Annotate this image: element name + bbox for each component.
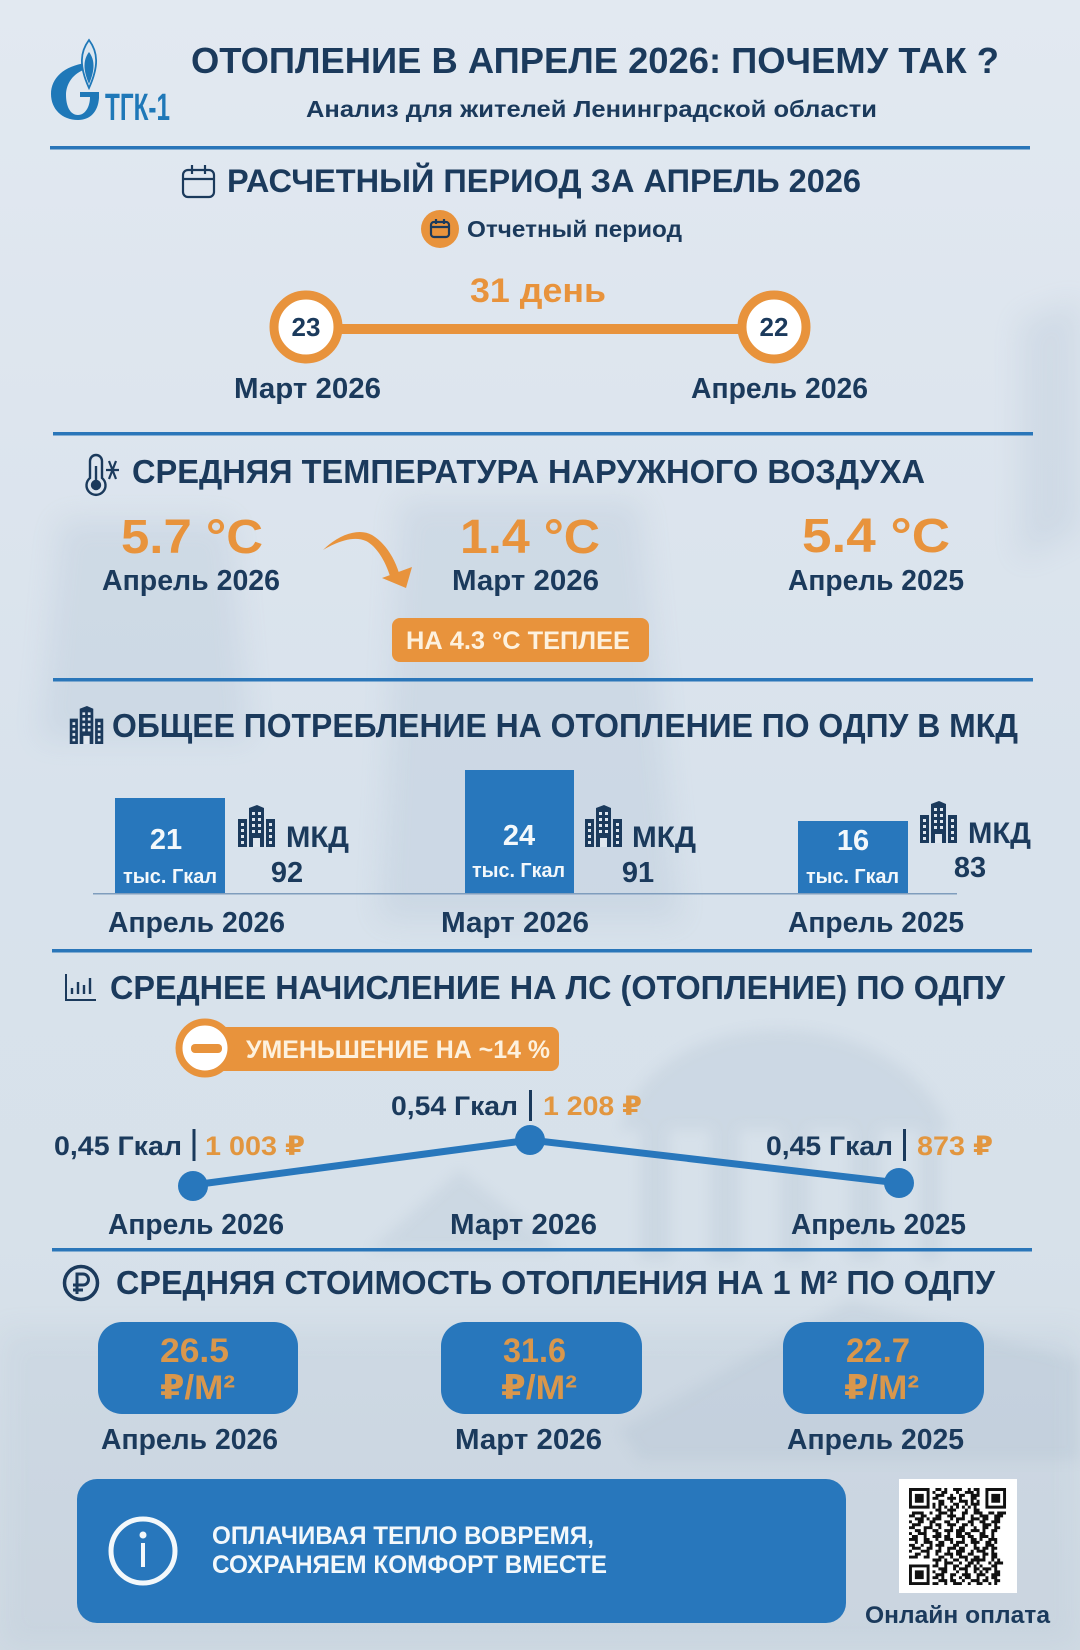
bar: April 2026: тыс. Гкал: [123, 866, 217, 888]
data label: March 2026: 1 208 ₽: [543, 1091, 642, 1121]
icon: TGK-1 logo: ТГК-1: [105, 87, 170, 129]
banner text: ОПЛАЧИВАЯ ТЕПЛО ВОВРЕМЯ,: [212, 1522, 594, 1550]
card: March 2026: [441, 1322, 642, 1414]
bar: March 2026: [465, 770, 574, 893]
axis label: April 2026: Апрель 2026: [108, 1209, 284, 1241]
heading: consumption: ОБЩЕЕ ПОТРЕБЛЕНИЕ НА ОТОПЛЕНИЕ ПО ОДПУ В МКД: [112, 707, 1018, 744]
heading: average charge: СРЕДНЕЕ НАЧИСЛЕНИЕ НА ЛС (ОТОПЛЕНИЕ) ПО ОДПУ: [110, 969, 1005, 1006]
MKD count: 91: 91: [622, 857, 654, 889]
subtitle: Анализ для жителей Ленинградской области: [306, 96, 877, 122]
card: March 2026: ₽/М²: [501, 1369, 577, 1407]
badge: reporting period: Отчетный период: [467, 216, 682, 242]
value: April 2025: 5.4 °C: [802, 510, 950, 563]
value: April 2026: 5.7 °C: [121, 511, 263, 564]
banner text: СОХРАНЯЕМ КОМФОРТ ВМЕСТЕ: [212, 1551, 607, 1579]
axis label: March 2026: Март 2026: [441, 907, 589, 939]
data label: April 2025: 873 ₽: [917, 1131, 993, 1161]
panel: billing period: [183, 163, 868, 405]
bar: April 2025: тыс. Гкал: [806, 866, 899, 888]
MKD count: 83: 83: [954, 852, 986, 884]
bar: April 2026: [115, 798, 225, 893]
bar: April 2025: [798, 821, 908, 893]
axis label: April 2025: Апрель 2025: [788, 907, 964, 939]
axis label: April 2026: Апрель 2026: [108, 907, 285, 939]
icon: thermometer with snowflake: [86, 455, 119, 495]
title: ОТОПЛЕНИЕ В АПРЕЛЕ 2026: ПОЧЕМУ ТАК ?: [191, 40, 999, 81]
bar: April 2025: 16: [837, 825, 869, 857]
axis label: April 2025: Апрель 2025: [791, 1209, 966, 1241]
bar: April 2026: 21: [150, 824, 182, 856]
data label: April 2026: 0,45 Гкал: [54, 1131, 182, 1161]
card: April 2025: 22.7: [846, 1332, 910, 1370]
bar: March 2026: 24: [503, 820, 535, 852]
data label: April 2025: 0,45 Гкал: [766, 1131, 893, 1161]
value: April 2026: Апрель 2026: [102, 565, 280, 597]
bar: March 2026: тыс. Гкал: [472, 860, 565, 882]
value: April 2025: [788, 510, 964, 597]
QR code: online payment: [899, 1479, 1017, 1593]
heading: cost per square metre: СРЕДНЯЯ СТОИМОСТЬ ОТОПЛЕНИЯ НА 1 М² ПО ОДПУ: [116, 1264, 995, 1301]
panel: average charge: [54, 969, 1005, 1241]
icon: buildings: [70, 706, 103, 744]
heading: temperature: СРЕДНЯЯ ТЕМПЕРАТУРА НАРУЖНОГО ВОЗДУХА: [132, 453, 925, 490]
card: April 2025: ₽/М²: [844, 1369, 919, 1407]
MKD count: 92: МКД: [286, 821, 349, 854]
MKD count: 92: [238, 805, 349, 889]
label: March 2026: Март 2026: [455, 1424, 602, 1456]
callout: decrease 14 percent: [179, 1022, 559, 1074]
data label: April 2026: [54, 1129, 305, 1161]
timeline: 22: [760, 312, 788, 342]
axis label: March 2026: Март 2026: [450, 1209, 597, 1241]
line chart: [178, 1125, 914, 1201]
label: online payment: Онлайн оплата: [865, 1602, 1051, 1629]
heading: billing period: РАСЧЕТНЫЙ ПЕРИОД ЗА АПРЕЛЬ 2026: [227, 163, 861, 199]
card: April 2026: 26.5: [160, 1332, 229, 1370]
panel: outdoor temperature: [86, 453, 964, 662]
value: March 2026: 1.4 °C: [460, 511, 600, 564]
panel: total consumption: [70, 706, 1031, 939]
data label: March 2026: 0,54 Гкал: [391, 1091, 518, 1121]
icon: info: [111, 1519, 175, 1583]
label: end date: Апрель 2026: [691, 373, 868, 405]
data label: April 2026: 1 003 ₽: [205, 1131, 305, 1161]
arrow: down to March: [323, 532, 412, 588]
panel: header: [51, 40, 999, 129]
value: March 2026: Март 2026: [452, 565, 599, 597]
banner text: [212, 1522, 607, 1579]
card: April 2025: [783, 1322, 984, 1414]
data label: March 2026: [391, 1090, 642, 1121]
card: April 2026: [98, 1322, 298, 1414]
MKD count: 83: [920, 801, 1031, 884]
icon: TGK-1 logo: [51, 40, 170, 129]
banner: pay on time: [77, 1479, 846, 1623]
label: start date: Март 2026: [234, 373, 381, 405]
label: April 2026: Апрель 2026: [101, 1424, 278, 1456]
MKD count: 83: МКД: [968, 817, 1031, 850]
MKD count: 92: 92: [271, 857, 303, 889]
icon: ruble in circle: [64, 1266, 98, 1300]
value: April 2025: Апрель 2025: [788, 565, 964, 597]
data label: April 2025: [766, 1129, 993, 1161]
MKD count: 91: [585, 805, 696, 889]
value: March 2026: [452, 511, 600, 597]
card: April 2026: ₽/М²: [160, 1369, 235, 1407]
value: April 2026: [102, 511, 280, 597]
callout: warmer by 4.3: [392, 618, 649, 662]
callout: warmer by 4.3: НА 4.3 °C ТЕПЛЕЕ: [406, 627, 630, 655]
MKD count: 91: МКД: [632, 821, 696, 854]
timeline: 23: [292, 312, 320, 342]
duration label: 31 день: [470, 272, 606, 310]
badge: reporting period: [421, 210, 682, 248]
label: April 2025: Апрель 2025: [787, 1424, 964, 1456]
callout: decrease 14 percent: УМЕНЬШЕНИЕ НА ~14 %: [246, 1036, 550, 1064]
card: March 2026: 31.6: [503, 1332, 566, 1370]
icon: calendar: [183, 165, 214, 197]
icon: bar chart: [66, 974, 96, 1000]
timeline: [274, 295, 806, 359]
panel: cost per square metre: [64, 1264, 995, 1456]
